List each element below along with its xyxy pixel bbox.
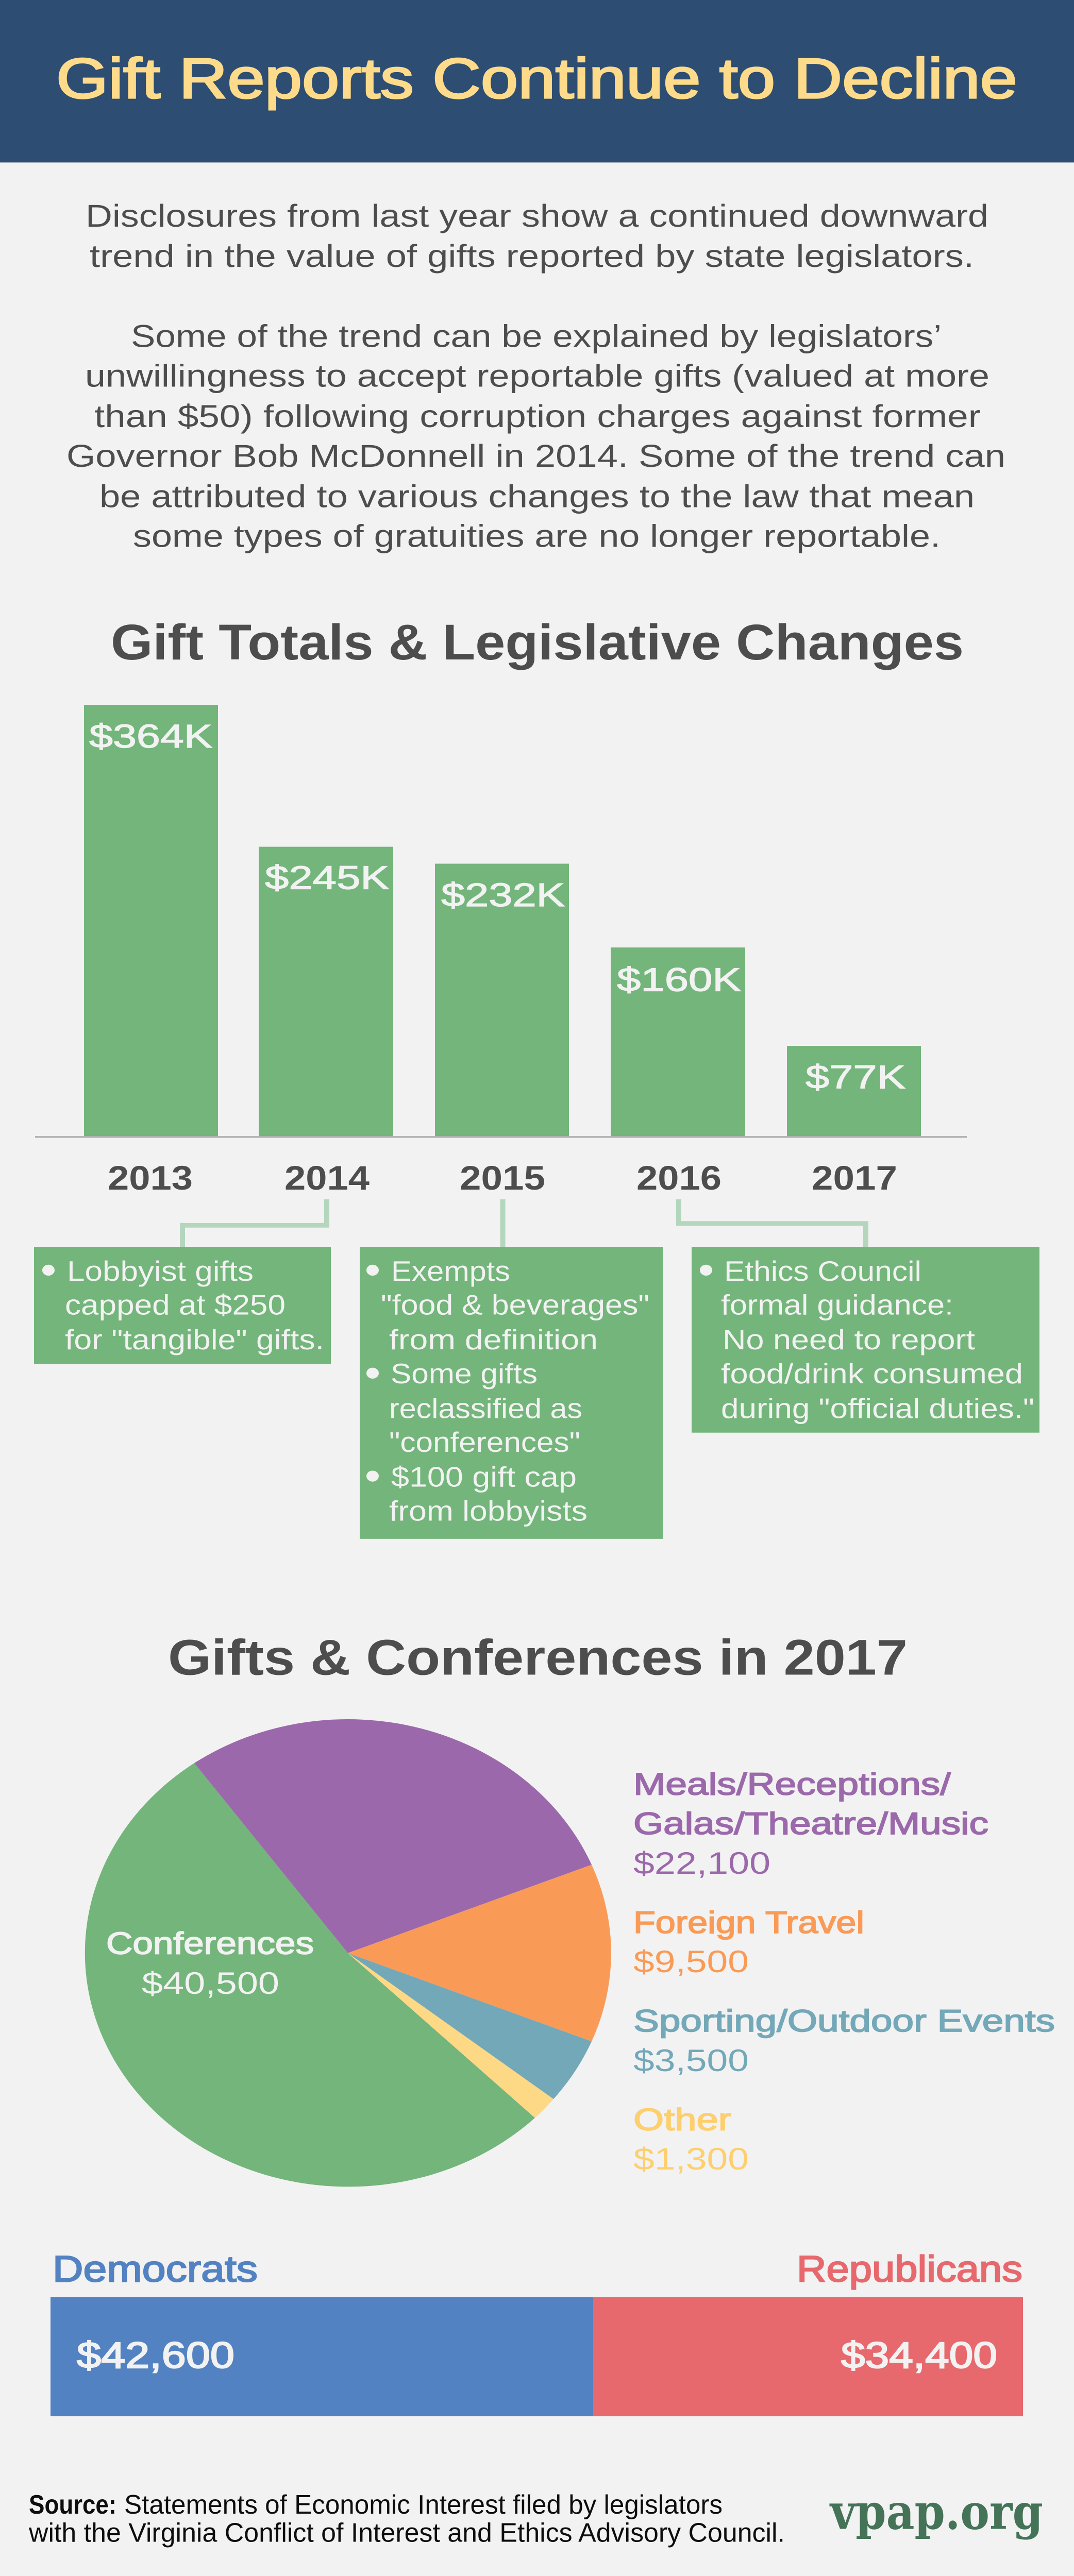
legend: meals: Galas/Theatre/Music bbox=[633, 1806, 988, 1841]
bar 2014 bbox=[259, 847, 393, 1137]
note 3: ethics council guidance: No need to report bbox=[723, 1324, 975, 1355]
source note: Statements of Economic Interest filed by legislators bbox=[124, 2489, 723, 2519]
note 3: ethics council guidance: Ethics Council bbox=[724, 1256, 921, 1287]
pie label: conferences: Conferences bbox=[106, 1926, 314, 1961]
bar 2013 bbox=[84, 705, 218, 1137]
note 3: ethics council guidance: formal guidance: bbox=[721, 1290, 953, 1321]
slice: meals bbox=[194, 1719, 592, 1953]
connector: 2015 to note 2 bbox=[500, 1199, 505, 1247]
note 3: ethics council guidance: food/drink consumed bbox=[721, 1358, 1023, 1389]
note 2: 2015 changes: from lobbyists bbox=[389, 1495, 588, 1527]
legend: other bbox=[633, 2102, 749, 2176]
title: Gift Reports Continue to Decline bbox=[56, 47, 1017, 110]
legend: meals: $22,100 bbox=[633, 1846, 770, 1880]
slice: foreign travel bbox=[348, 1865, 611, 2041]
intro text block: Governor Bob McDonnell in 2014. Some of the trend can bbox=[66, 438, 1005, 473]
note 3: ethics council guidance bbox=[692, 1247, 1039, 1433]
intro text block bbox=[66, 198, 1005, 554]
note 1: lobbyist gifts bbox=[34, 1247, 331, 1364]
note 2: 2015 changes: from definition bbox=[389, 1324, 598, 1355]
bar 2015 bbox=[435, 863, 569, 1137]
legend: sporting: Sporting/Outdoor Events bbox=[633, 2003, 1055, 2038]
source note bbox=[28, 2489, 785, 2548]
intro text block: trend in the value of gifts reported by state legislators. bbox=[90, 239, 974, 274]
intro text block: some types of gratuities are no longer reportable. bbox=[133, 518, 941, 554]
connector: 2014 to note 1 bbox=[182, 1199, 327, 1247]
legend: foreign travel: $9,500 bbox=[633, 1944, 749, 1979]
party split bar bbox=[51, 2297, 1023, 2416]
pie chart: gifts and conferences bbox=[85, 1719, 611, 2187]
slice: sporting bbox=[348, 1953, 592, 2099]
legend: meals: Meals/Receptions/ bbox=[633, 1767, 951, 1802]
note 2: 2015 changes: $100 gift cap bbox=[391, 1462, 577, 1493]
legend: sporting: $3,500 bbox=[633, 2043, 749, 2078]
pie label: conferences: $40,500 bbox=[142, 1965, 279, 2001]
note 2: 2015 changes: Some gifts bbox=[391, 1358, 538, 1389]
year axis labels: 2015 bbox=[460, 1159, 545, 1197]
intro text block: Disclosures from last year show a continued downward bbox=[86, 198, 988, 233]
heading: gifts and conferences: Gifts & Conferences in 2017 bbox=[168, 1630, 908, 1686]
intro text block: unwillingness to accept reportable gifts (valued at more bbox=[85, 358, 989, 394]
legend: foreign travel: Foreign Travel bbox=[633, 1905, 864, 1940]
intro text block: Some of the trend can be explained by legislators’ bbox=[131, 318, 942, 354]
intro text block: be attributed to various changes to the law that mean bbox=[99, 479, 975, 514]
bar 2017: $77K bbox=[806, 1059, 905, 1096]
legend: foreign travel bbox=[633, 1905, 864, 1979]
note 1: lobbyist gifts: for "tangible" gifts. bbox=[65, 1324, 324, 1355]
bar 2017 bbox=[787, 1046, 921, 1137]
note 2: 2015 changes bbox=[360, 1247, 663, 1539]
heading: gift totals: Gift Totals & Legislative Changes bbox=[111, 615, 964, 671]
slice: other bbox=[348, 1953, 553, 2118]
note 3: ethics council guidance: during "official duties." bbox=[721, 1393, 1034, 1425]
connector: 2016 to note 3 bbox=[679, 1199, 866, 1247]
intro text block: than $50) following corruption charges against former bbox=[94, 398, 981, 434]
note 1: lobbyist gifts: Lobbyist gifts bbox=[67, 1256, 254, 1287]
bar 2013: $364K bbox=[89, 718, 212, 755]
bar 2016: $160K bbox=[617, 961, 741, 998]
year axis labels: 2014 bbox=[284, 1159, 370, 1197]
note 2: 2015 changes: "conferences" bbox=[389, 1427, 580, 1458]
republicans segment bbox=[593, 2297, 1023, 2416]
year axis labels bbox=[108, 1159, 897, 1197]
year axis labels: 2013 bbox=[108, 1159, 193, 1197]
bar 2016 bbox=[611, 947, 745, 1137]
democrats segment bbox=[51, 2297, 593, 2416]
legend: other: Other bbox=[633, 2102, 731, 2137]
year axis labels: 2017 bbox=[812, 1159, 897, 1197]
year axis labels: 2016 bbox=[636, 1159, 721, 1197]
note 2: 2015 changes: Exempts bbox=[391, 1256, 510, 1287]
note 1: lobbyist gifts: capped at $250 bbox=[65, 1290, 286, 1321]
note 2: 2015 changes: reclassified as bbox=[389, 1393, 582, 1425]
source note: Source: bbox=[29, 2489, 116, 2519]
slice: conferences bbox=[85, 1763, 535, 2187]
party label: democrats: Democrats bbox=[53, 2249, 258, 2290]
source note: with the Virginia Conflict of Interest and Ethics Advisory Council. bbox=[28, 2517, 785, 2548]
note 2: 2015 changes: "food & beverages" bbox=[381, 1290, 649, 1321]
legend: other: $1,300 bbox=[633, 2142, 749, 2176]
legend: meals bbox=[633, 1767, 988, 1880]
party label: republicans: Republicans bbox=[797, 2249, 1022, 2290]
bar chart: gift totals by year bbox=[35, 705, 967, 1197]
democrats segment: $42,600 bbox=[77, 2335, 234, 2376]
bar 2014: $245K bbox=[265, 859, 389, 896]
legend: sporting bbox=[633, 2003, 1055, 2078]
header banner bbox=[0, 0, 1074, 162]
bar 2015: $232K bbox=[441, 877, 565, 913]
pie label: conferences bbox=[106, 1926, 314, 2001]
republicans segment: $34,400 bbox=[841, 2335, 997, 2376]
